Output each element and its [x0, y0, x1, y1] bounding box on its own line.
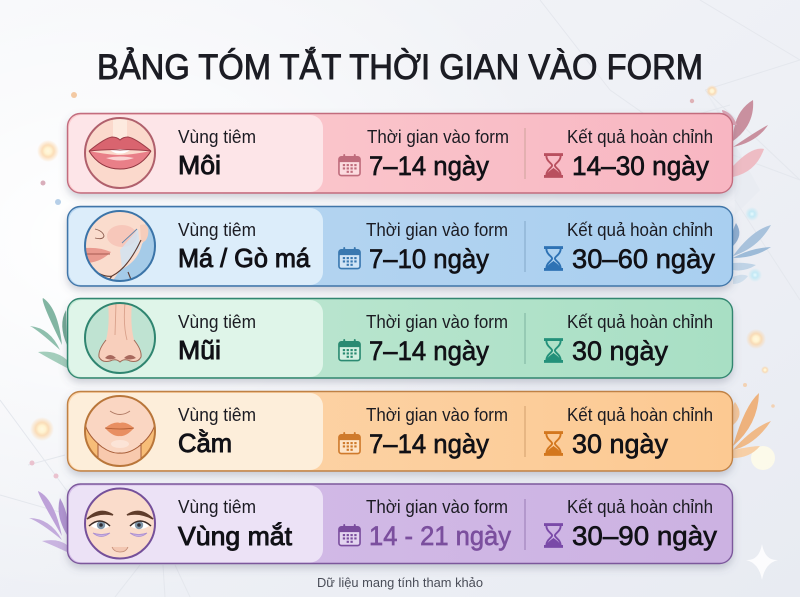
- text: form value: 7–14 ngày: [369, 429, 489, 459]
- panel: Mũi: [68, 298, 732, 378]
- text: zone name: Vùng mắt: [178, 521, 293, 551]
- text: form label: Thời gian vào form: [366, 312, 508, 332]
- footer note: Dữ liệu mang tính tham khảo: [317, 575, 483, 590]
- panel: Môi: [68, 114, 732, 193]
- icon: hourglass: [544, 431, 563, 456]
- icon: nose: [85, 303, 155, 373]
- panel: Vùng mắt: [68, 484, 732, 564]
- icon: calendar: [339, 432, 360, 454]
- panel: Má / Gò má: [68, 206, 732, 286]
- icon: hourglass: [544, 338, 563, 363]
- text: zone label: Vùng tiêm: [178, 312, 256, 332]
- text: form label: Thời gian vào form: [366, 220, 508, 240]
- leaves: pink: [722, 100, 768, 177]
- text: form label: Thời gian vào form: [366, 405, 508, 425]
- text: result label: Kết quả hoàn chỉnh: [567, 497, 713, 517]
- icon: hourglass: [544, 246, 563, 271]
- text: form value: 7–14 ngày: [369, 151, 489, 181]
- text: form value: 7–14 ngày: [369, 336, 489, 366]
- panel: Cằm: [68, 392, 732, 471]
- text: result label: Kết quả hoàn chỉnh: [567, 220, 713, 240]
- text: form label: Thời gian vào form: [367, 127, 509, 147]
- text: zone name: Mũi: [178, 335, 221, 365]
- text: zone label: Vùng tiêm: [178, 127, 256, 147]
- icon: hourglass: [544, 523, 563, 548]
- icon: cheek: [84, 210, 155, 285]
- icon: hourglass: [544, 153, 563, 178]
- icon: chin: [85, 395, 155, 470]
- icon: calendar: [339, 524, 360, 546]
- text: result value: 14–30 ngày: [572, 151, 709, 181]
- icon: calendar: [339, 247, 360, 269]
- icon: lips: [85, 118, 155, 188]
- text: form value: 14 - 21 ngày: [369, 521, 511, 551]
- leaves: blue: [732, 223, 771, 284]
- text: result value: 30 ngày: [572, 429, 668, 459]
- text: result label: Kết quả hoàn chỉnh: [567, 127, 713, 147]
- text: zone name: Môi: [178, 150, 221, 180]
- decorative sparkles and dots: [30, 85, 778, 580]
- leaves: purple: [29, 491, 68, 552]
- text: result value: 30–90 ngày: [572, 521, 718, 551]
- icon: eyes: [85, 488, 155, 558]
- icon: calendar: [339, 154, 360, 176]
- leaves: green: [30, 298, 67, 368]
- text: zone label: Vùng tiêm: [178, 497, 256, 517]
- icon: calendar: [339, 339, 360, 361]
- text: result value: 30 ngày: [572, 336, 668, 366]
- text: result label: Kết quả hoàn chỉnh: [567, 312, 713, 332]
- text: zone label: Vùng tiêm: [178, 220, 256, 240]
- text: result value: 30–60 ngày: [572, 244, 715, 274]
- text: form label: Thời gian vào form: [366, 497, 508, 517]
- text: form value: 7–10 ngày: [369, 244, 489, 274]
- text: result label: Kết quả hoàn chỉnh: [567, 405, 713, 425]
- title: BẢNG TÓM TẮT THỜI GIAN VÀO FORM: [97, 47, 703, 87]
- text: zone label: Vùng tiêm: [178, 405, 256, 425]
- text: zone name: Má / Gò má: [178, 243, 311, 273]
- text: zone name: Cằm: [178, 428, 232, 458]
- leaves: orange: [733, 393, 771, 458]
